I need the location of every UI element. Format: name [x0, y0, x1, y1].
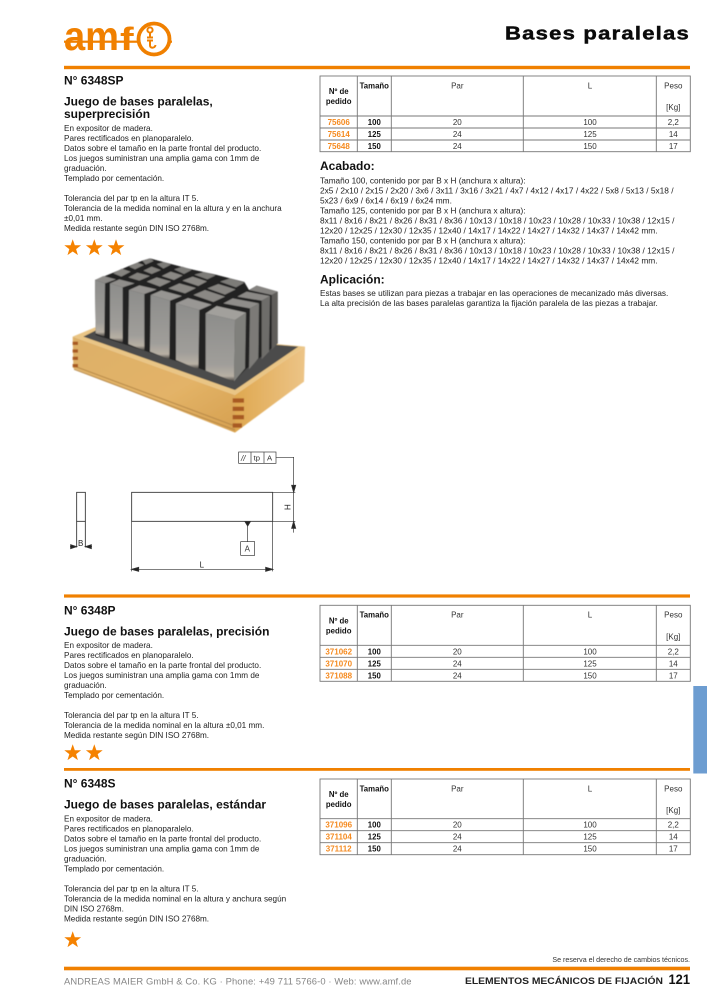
table: 6348S: 17: [669, 845, 678, 854]
description text: Tolerancia de la medida nominal en la altura y anchura según: [64, 895, 286, 904]
description text: [64, 641, 264, 740]
table: 6348S: 150: [368, 845, 381, 854]
table: 6348P: 2,2: [668, 647, 679, 656]
table: 6348SP: Peso: [664, 81, 683, 90]
table: 6348S: 125: [368, 833, 381, 842]
rating: three stars: [64, 239, 124, 255]
description text: Medida restante según DIN ISO 2768m.: [64, 915, 209, 924]
table: 6348S: pedido: [326, 800, 352, 809]
table: 6348S: 371096: [325, 821, 353, 830]
table: 6348SP: 14: [669, 130, 678, 139]
table: 6348S: [Kg]: [666, 806, 680, 815]
logo: amf: [64, 13, 172, 59]
table: 6348P: pedido: [326, 626, 352, 635]
back blocks: [113, 258, 244, 302]
description text: Los juegos suministran una amplia gama con 1mm de: [64, 154, 260, 163]
text: Acabado sizes: Tamaño 150, contenido por par B x H (anchura x altura):: [320, 236, 526, 245]
description text: [64, 124, 282, 233]
heading: Acabado: Acabado:: [320, 159, 375, 173]
table: 6348S: 125: [583, 833, 597, 842]
table: 6348S: L: [588, 784, 593, 793]
text: Aplicación: La alta precisión de las bases paralelas garantiza la fijación paralela de las piezas a trabajar.: [320, 299, 658, 308]
table: 6348P: [Kg]: [666, 632, 680, 641]
table: 6348S: 150: [583, 845, 597, 854]
description text: Medida restante según DIN ISO 2768m.: [64, 731, 209, 740]
description text: Datos sobre el tamaño en la parte frontal del producto.: [64, 144, 261, 153]
description text: Los juegos suministran una amplia gama con 1mm de: [64, 845, 260, 854]
description text: Tolerancia del par tp en la altura IT 5.: [64, 885, 199, 894]
table: 6348P: 14: [669, 659, 678, 668]
page title: Bases paralelas: [505, 23, 690, 43]
table: 6348SP: [Kg]: [666, 103, 680, 112]
tolerance frame: [239, 452, 296, 533]
table: 6348SP: 17: [669, 142, 678, 151]
footer rule: [64, 967, 690, 970]
table: 6348SP: Nº de: [329, 87, 349, 96]
text: Acabado sizes: 2x5 / 2x10 / 2x15 / 2x20 / 3x6 / 3x11 / 3x16 / 3x21 / 4x7 / 4x12 / 4x17 / 4x22 / 5x8 / 5x13 / 5x18 /: [320, 185, 674, 195]
product heading: superprecisión: [64, 107, 150, 121]
side view: B: [78, 539, 83, 548]
table: 6348P: Peso: [664, 611, 683, 620]
table: 6348S: 100: [368, 821, 381, 830]
front row blocks: [95, 280, 105, 337]
text: Acabado sizes: [320, 176, 675, 265]
section rule: 6348S: [64, 768, 690, 771]
dark mass behind blocks: [95, 258, 278, 382]
code heading: N° 6348S: [64, 777, 116, 791]
disclaimer: Se reserva el derecho de cambios técnicos.: [552, 956, 690, 964]
table: 6348S: Nº de: [329, 790, 349, 799]
footer: company contact: ANDREAS MAIER GmbH & Co. KG · Phone: +49 711 5766-0 · Web: www.amf.de: [64, 975, 412, 986]
table: 6348S: 24: [453, 833, 462, 842]
description text: Pares rectificados en planoparalelo.: [64, 825, 194, 834]
description text: Datos sobre el tamaño en la parte frontal del producto.: [64, 835, 261, 844]
heading: Aplicación: Aplicación:: [320, 272, 385, 286]
code heading: N° 6348P: [64, 603, 116, 617]
front view: L: [200, 560, 205, 569]
description text: En expositor de madera.: [64, 124, 153, 133]
tolerance frame: A: [267, 454, 273, 463]
table: 6348SP: [320, 76, 690, 152]
table: 6348P: Nº de: [329, 616, 349, 625]
table: 6348P: 125: [368, 659, 381, 668]
section rule: 6348P: [64, 594, 690, 598]
table: 6348P: Par: [451, 611, 464, 620]
description text: ±0,01 mm.: [64, 214, 102, 223]
table: 6348SP: 75606: [328, 118, 350, 127]
description text: Pares rectificados en planoparalelo.: [64, 651, 194, 660]
text: Acabado sizes: 8x11 / 8x16 / 8x21 / 8x26 / 8x31 / 8x36 / 10x13 / 10x18 / 10x23 / 10x28 / 10x33 / 10x38 / 12x15 /: [320, 215, 675, 225]
table: 6348P: Tamaño: [360, 611, 389, 620]
table: 6348SP: 100: [368, 118, 381, 127]
description text: [64, 815, 286, 924]
panel: N° 6348SP: [64, 73, 282, 255]
right column blocks: [272, 292, 278, 350]
table: 6348SP: 75614: [328, 130, 350, 139]
table: 6348SP: 75648: [328, 142, 350, 151]
description text: Medida restante según DIN ISO 2768m.: [64, 224, 209, 233]
description text: Tolerancia de la medida nominal en la altura ±0,01 mm.: [64, 721, 264, 730]
product heading: Juego de bases paralelas, precisión: [64, 624, 269, 638]
photo: parallel bases in wooden box: [73, 258, 305, 433]
rating: one star: [64, 931, 81, 947]
logo: amf: am: [64, 13, 119, 59]
table: 6348P: 24: [453, 659, 462, 668]
table: 6348SP: Tamaño: [360, 81, 389, 90]
description text: Tolerancia de la medida nominal en la altura y en la anchura: [64, 204, 282, 213]
table: 6348S: Par: [451, 784, 464, 793]
table: 6348S: 371104: [326, 833, 352, 842]
datum A: [241, 522, 255, 555]
description text: graduación.: [64, 681, 107, 690]
table: 6348SP: L: [588, 81, 593, 90]
product heading: [64, 94, 213, 121]
text: Acabado sizes: 8x11 / 8x16 / 8x21 / 8x26 / 8x31 / 8x36 / 10x13 / 10x18 / 10x23 / 10x28 / 10x33 / 10x38 / 12x15 /: [320, 245, 675, 255]
description text: Los juegos suministran una amplia gama con 1mm de: [64, 671, 260, 680]
table: 6348P: 150: [583, 671, 597, 680]
box: [73, 327, 305, 395]
table: 6348SP: 24: [453, 130, 462, 139]
table: 6348SP: 150: [368, 142, 381, 151]
section rule: top: [64, 66, 690, 69]
description text: graduación.: [64, 164, 107, 173]
text: Acabado sizes: 12x20 / 12x25 / 12x30 / 12x35 / 12x40 / 14x17 / 14x22 / 14x27 / 14x32 / 14x37 / 14x42 mm.: [320, 225, 658, 235]
table: 6348P: 371070: [325, 659, 353, 668]
table: 6348SP: 125: [368, 130, 381, 139]
table: 6348S: 20: [453, 821, 462, 830]
table: 6348SP: 20: [453, 118, 462, 127]
footer: chapter title: ELEMENTOS MECÁNICOS DE FIJACIÓN: [465, 975, 663, 986]
table: 6348P: 100: [583, 647, 597, 656]
table: 6348S: 14: [669, 833, 678, 842]
front view: [132, 492, 295, 571]
table: 6348P: 371062: [325, 647, 353, 656]
rating: two stars: [64, 744, 103, 760]
panel: N° 6348S: [64, 777, 286, 947]
table: 6348SP: 24: [453, 142, 462, 151]
table: 6348SP: 100: [583, 118, 597, 127]
tolerance frame: tp: [254, 454, 260, 463]
code heading: N° 6348SP: [64, 73, 124, 87]
description text: En expositor de madera.: [64, 641, 153, 650]
text: Acabado sizes: 12x20 / 12x25 / 12x30 / 12x35 / 12x40 / 14x17 / 14x22 / 14x27 / 14x32 / 14x37 / 14x42 mm.: [320, 255, 658, 265]
technical drawing: [70, 452, 296, 571]
text: Acabado sizes: Tamaño 100, contenido por par B x H (anchura x altura):: [320, 176, 526, 185]
table: 6348S: Tamaño: [360, 784, 389, 793]
side tab: [693, 686, 707, 774]
table: 6348P: 150: [368, 671, 381, 680]
description text: Datos sobre el tamaño en la parte frontal del producto.: [64, 661, 261, 670]
description text: En expositor de madera.: [64, 815, 153, 824]
table: 6348P: 100: [368, 647, 381, 656]
table: 6348S: [320, 779, 690, 855]
text: Aplicación: Estas bases se utilizan para piezas a trabajar en las operaciones de mecanizado más diversas.: [320, 289, 668, 298]
description text: Templado por cementación.: [64, 691, 164, 700]
product heading: Juego de bases paralelas, estándar: [64, 798, 266, 812]
table: 6348P: 371088: [325, 671, 353, 680]
table: 6348P: 125: [583, 659, 597, 668]
description text: Tolerancia del par tp en la altura IT 5.: [64, 194, 199, 203]
table: 6348SP: Par: [451, 81, 464, 90]
table: 6348S: Peso: [664, 784, 683, 793]
description text: Templado por cementación.: [64, 174, 164, 183]
panel: N° 6348P: [64, 603, 269, 760]
table: 6348P: 24: [453, 671, 462, 680]
table: 6348P: [320, 605, 690, 681]
text: Acabado sizes: 5x23 / 6x9 / 6x14 / 6x19 / 6x24 mm.: [320, 195, 452, 205]
table: 6348SP: pedido: [326, 97, 352, 106]
table: 6348P: 20: [453, 647, 462, 656]
product heading: Juego de bases paralelas,: [64, 94, 213, 108]
text: Acabado sizes: Tamaño 125, contenido por par B x H (anchura x altura):: [320, 206, 526, 215]
text: Aplicación: [320, 289, 668, 308]
description text: Templado por cementación.: [64, 865, 164, 874]
table: 6348S: 24: [453, 845, 462, 854]
table: 6348SP: 150: [583, 142, 597, 151]
description text: DIN ISO 2768m.: [64, 905, 124, 914]
table: 6348S: 2,2: [668, 821, 679, 830]
front view: H: [283, 504, 292, 510]
table: 6348P: L: [588, 611, 593, 620]
description text: Tolerancia del par tp en la altura IT 5.: [64, 711, 199, 720]
footer: page number: 121: [668, 972, 690, 987]
table: 6348SP: 125: [583, 130, 597, 139]
tolerance frame: //: [240, 454, 246, 463]
logo: amf: f: [120, 21, 134, 57]
table: 6348S: 371112: [326, 845, 352, 854]
table: 6348P: 17: [669, 671, 678, 680]
description text: Pares rectificados en planoparalelo.: [64, 134, 194, 143]
table: 6348SP: 2,2: [668, 118, 679, 127]
table: 6348S: 100: [583, 821, 597, 830]
description text: graduación.: [64, 855, 107, 864]
datum A: A: [245, 545, 251, 554]
side view: [70, 492, 92, 549]
